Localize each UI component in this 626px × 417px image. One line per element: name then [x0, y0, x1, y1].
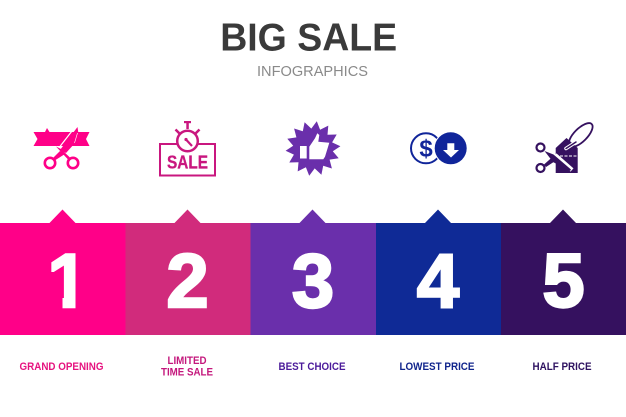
- label: limited time sale: LIMITED: [168, 355, 207, 367]
- icon: stopwatch sale sign: [160, 121, 215, 176]
- panel: step 3: [250, 210, 376, 373]
- icon: coin and down arrow: $: [419, 136, 433, 162]
- subtitle: INFOGRAPHICS: [257, 63, 368, 80]
- icon: thumbs up badge: [286, 121, 340, 176]
- label: lowest price: LOWEST PRICE: [400, 361, 474, 373]
- icon: ribbon and scissors: [34, 127, 90, 168]
- number 1: 1: [47, 239, 90, 324]
- number block 5: [501, 210, 626, 335]
- label: limited time sale: TIME SALE: [161, 367, 213, 379]
- panel: step 2: [126, 210, 250, 379]
- number 4: 4: [417, 239, 459, 324]
- label: best choice: BEST CHOICE: [278, 361, 346, 373]
- number 2: 2: [166, 239, 209, 324]
- number block 1: [0, 210, 126, 335]
- label: grand opening: GRAND OPENING: [20, 361, 104, 373]
- icon: scissors cutting price tag: [536, 119, 596, 173]
- label: half price: HALF PRICE: [532, 361, 592, 373]
- number 3: 3: [292, 239, 334, 324]
- number block 3: [250, 210, 376, 335]
- title: BIG SALE: [220, 16, 397, 59]
- icon: coin and down arrow: [411, 131, 468, 165]
- number block 2: [126, 210, 250, 335]
- number block 4: [376, 210, 501, 335]
- label: limited time sale: [161, 355, 213, 379]
- number 5: 5: [542, 239, 585, 324]
- panel: step 1: [0, 210, 126, 373]
- icon: stopwatch sale sign: SALE: [167, 152, 208, 172]
- panel: step 4: [376, 210, 501, 373]
- panel: step 5: [501, 210, 626, 373]
